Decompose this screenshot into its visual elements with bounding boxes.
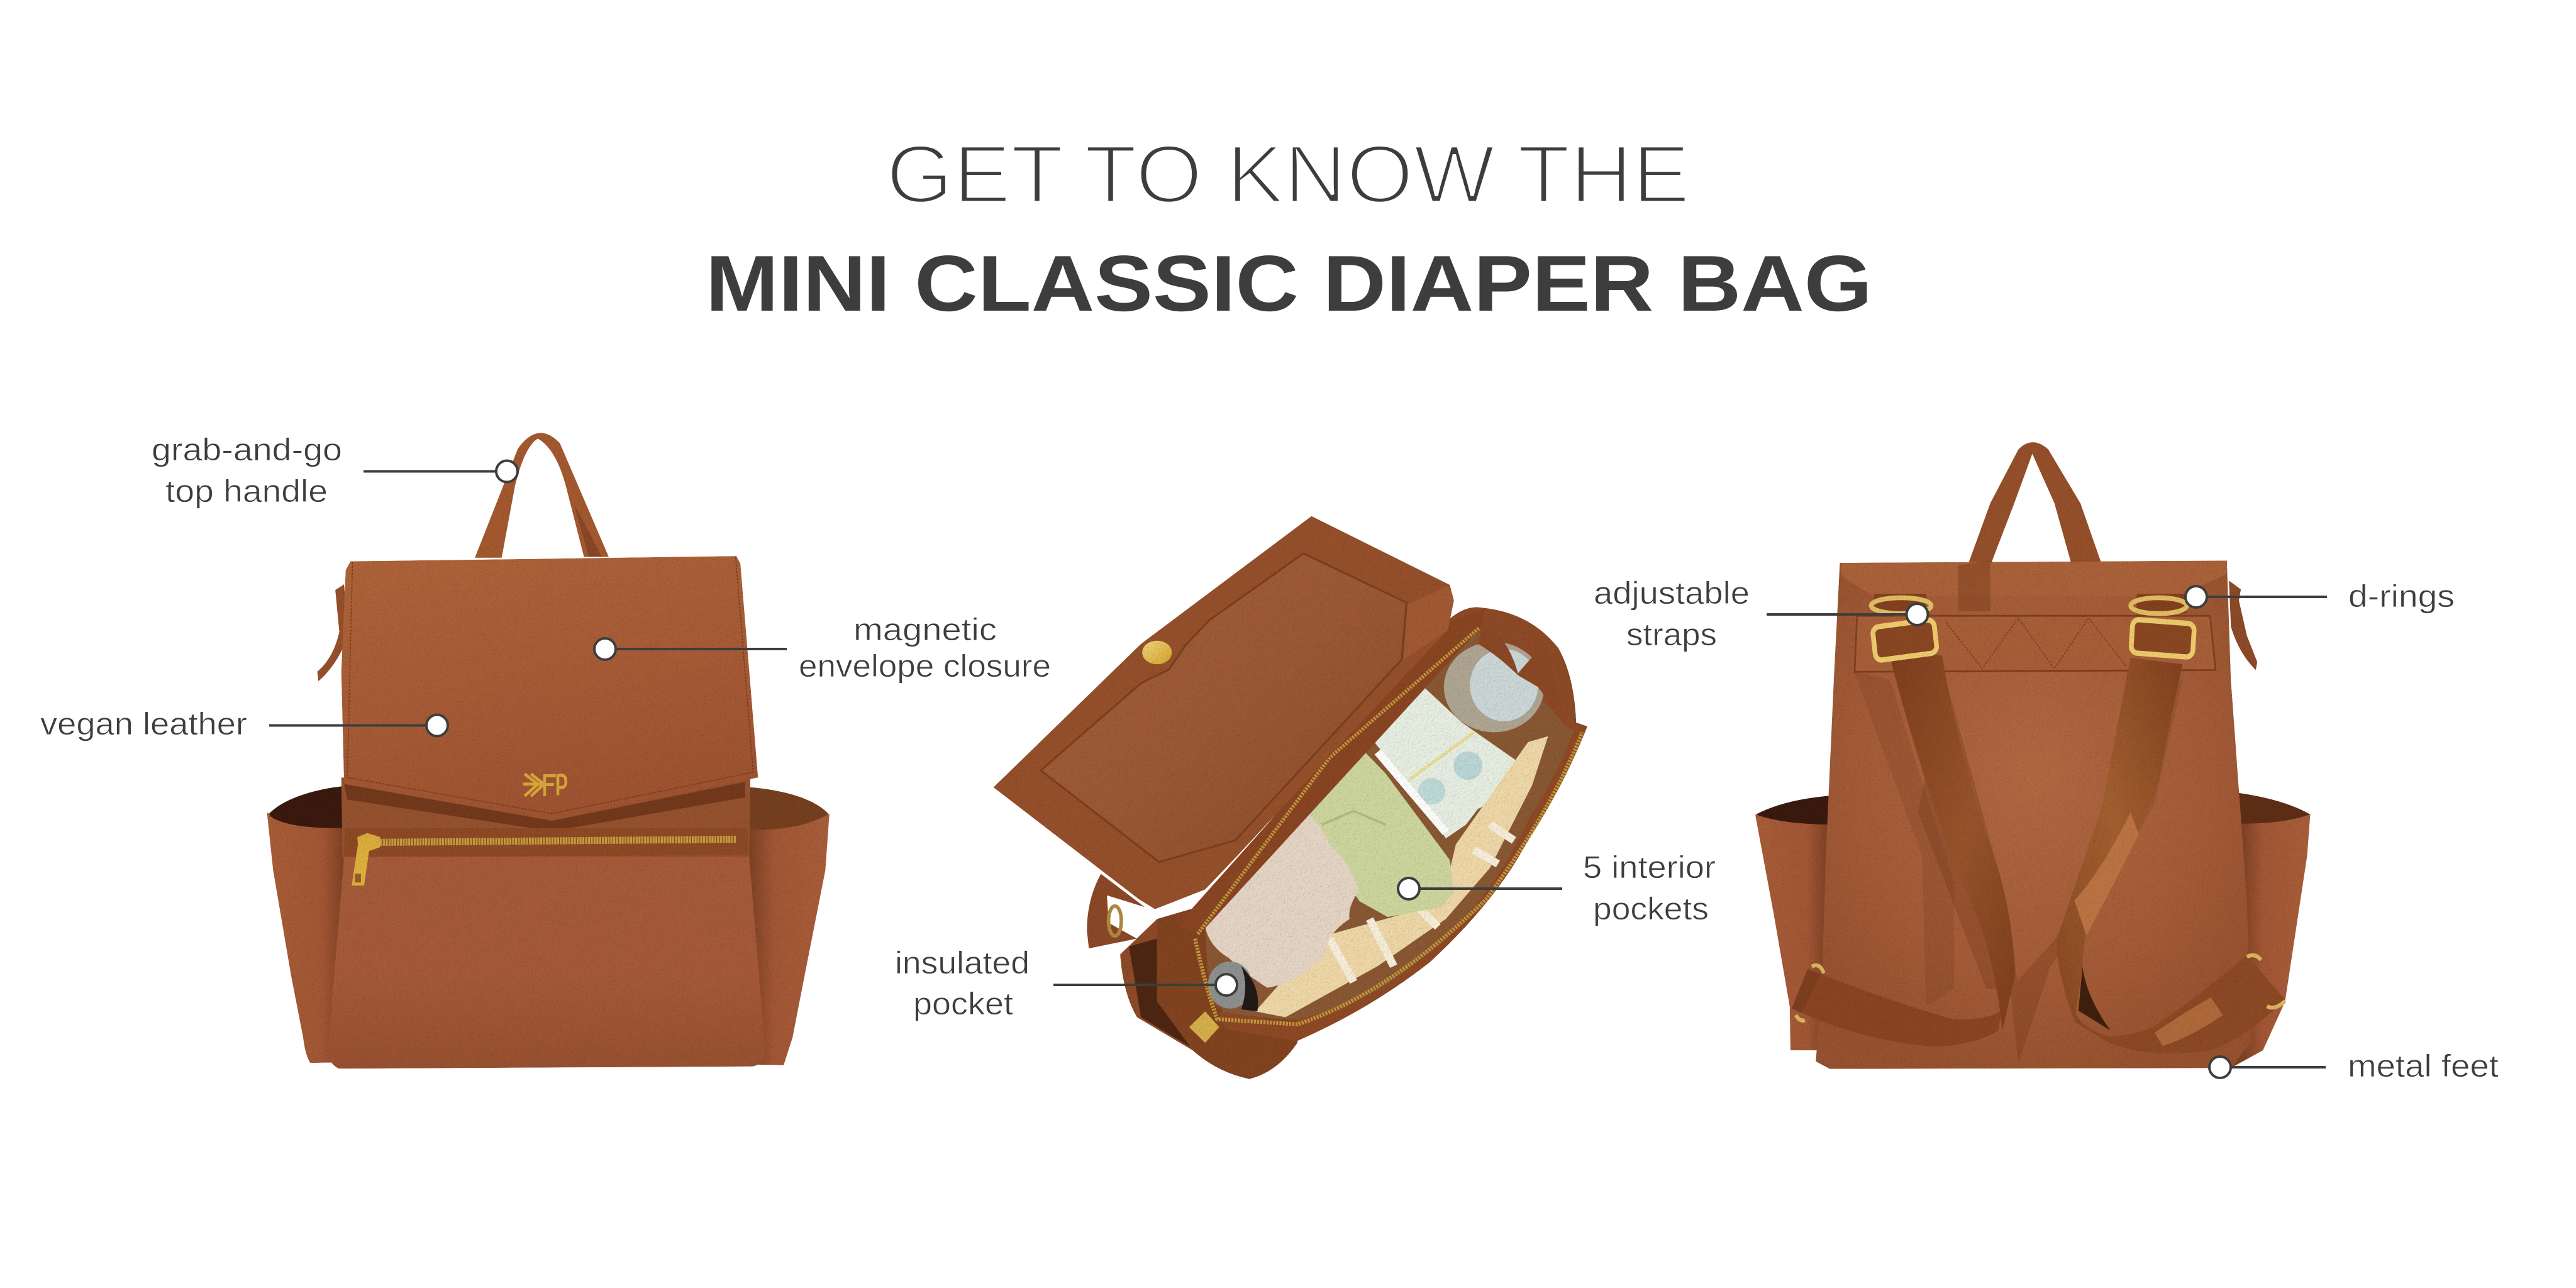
zipper pull (1189, 1011, 1219, 1043)
upper body behind flap (341, 777, 750, 859)
label text (1594, 575, 1750, 652)
label text: d-rings (2348, 579, 2455, 614)
label text: 5 interior (1583, 850, 1716, 885)
right side pocket (736, 786, 830, 1065)
insulated bottle (1208, 962, 1258, 1011)
strap tabs (1874, 594, 2187, 614)
leader line and marker (1053, 974, 1237, 996)
lighter leather corner (1404, 585, 1454, 660)
label text: vegan leather (40, 706, 247, 741)
callout: metal feet (2209, 1048, 2499, 1084)
magnetic snap (1142, 641, 1172, 664)
label text: adjustable (1594, 575, 1750, 611)
side strap and ring (1087, 874, 1145, 948)
dark pocket at front (1129, 938, 1193, 1049)
leader line and marker (1767, 604, 1928, 625)
yoke panel (1855, 616, 2216, 672)
back flap top (1841, 560, 2227, 596)
callout: 5 interior pockets (1398, 850, 1716, 926)
green wipes pouch (1297, 736, 1454, 917)
lower zipper (1195, 732, 1582, 1024)
label text: straps (1626, 617, 1717, 652)
leader line and marker (269, 714, 448, 736)
label text: pocket (913, 986, 1013, 1021)
strap shadows on body (1918, 680, 2114, 1063)
interior lining (1197, 628, 1578, 1019)
left side pocket (267, 786, 359, 1063)
front handle (475, 433, 609, 558)
callout: vegan leather (40, 706, 448, 741)
bag: back view (1755, 442, 2311, 1069)
callout: magnetic envelope closure (594, 612, 1051, 684)
label text: envelope closure (799, 648, 1051, 684)
lower rim (1219, 726, 1586, 1041)
lower rings (1796, 955, 2285, 1021)
back body (1816, 560, 2251, 1069)
callout: adjustable straps (1594, 575, 1928, 652)
right side pocket (2231, 792, 2311, 1068)
leader line and marker (1398, 878, 1562, 899)
label text: pockets (1593, 891, 1709, 926)
striped cloth (1255, 736, 1548, 1018)
open flap (994, 516, 1454, 909)
front pocket (328, 857, 765, 1069)
zipper tab (2229, 580, 2257, 670)
leader line and marker (364, 460, 518, 482)
label text: top handle (165, 474, 328, 509)
label text: grab-and-go (152, 432, 342, 467)
rear handle (1958, 442, 2111, 611)
diapers (1363, 685, 1518, 838)
label text (1583, 850, 1716, 926)
label text: metal feet (2348, 1048, 2499, 1084)
flap stitching (347, 557, 753, 814)
zipper tape (344, 828, 748, 857)
bag shell (1120, 607, 1587, 1079)
leader line and marker (2209, 1057, 2326, 1078)
leader line and marker (2185, 586, 2327, 608)
heading line: mini classic diaper bag: MINI CLASSIC DIAPER BAG (706, 239, 1872, 328)
envelope flap (341, 556, 758, 820)
d-rings (1871, 597, 2187, 614)
label text: insulated (895, 945, 1030, 980)
flap shadow (344, 782, 745, 831)
label text (799, 612, 1051, 684)
left side pocket (1755, 796, 1842, 1050)
zipper pull (352, 833, 380, 886)
heading line: get to know the: GET TO KNOW THE (886, 128, 1690, 220)
handle base shadow (1958, 560, 1990, 611)
fluffy toy (1205, 799, 1358, 988)
sliders (1872, 619, 2194, 661)
lower left strap tab (1792, 969, 1820, 1013)
zipper teeth (377, 839, 736, 842)
bag: front view (267, 433, 830, 1069)
label text (152, 432, 342, 509)
nylon inner panel (1041, 553, 1406, 862)
front zipper tab (317, 584, 348, 681)
leader line and marker (594, 638, 787, 660)
left shoulder strap (1792, 649, 2015, 1047)
upper zipper tape (1179, 609, 1484, 935)
callout: grab-and-go top handle (152, 432, 518, 509)
gold logo (523, 774, 566, 796)
title (706, 128, 1872, 328)
baby bottle (1444, 626, 1566, 732)
front lip (1157, 907, 1297, 1079)
label text (895, 945, 1030, 1021)
callout: insulated pocket (895, 945, 1237, 1021)
callout: d-rings (2185, 579, 2455, 614)
bag: open interior view (994, 516, 1587, 1079)
label text: magnetic (853, 612, 997, 647)
right shoulder strap (2057, 658, 2285, 1053)
